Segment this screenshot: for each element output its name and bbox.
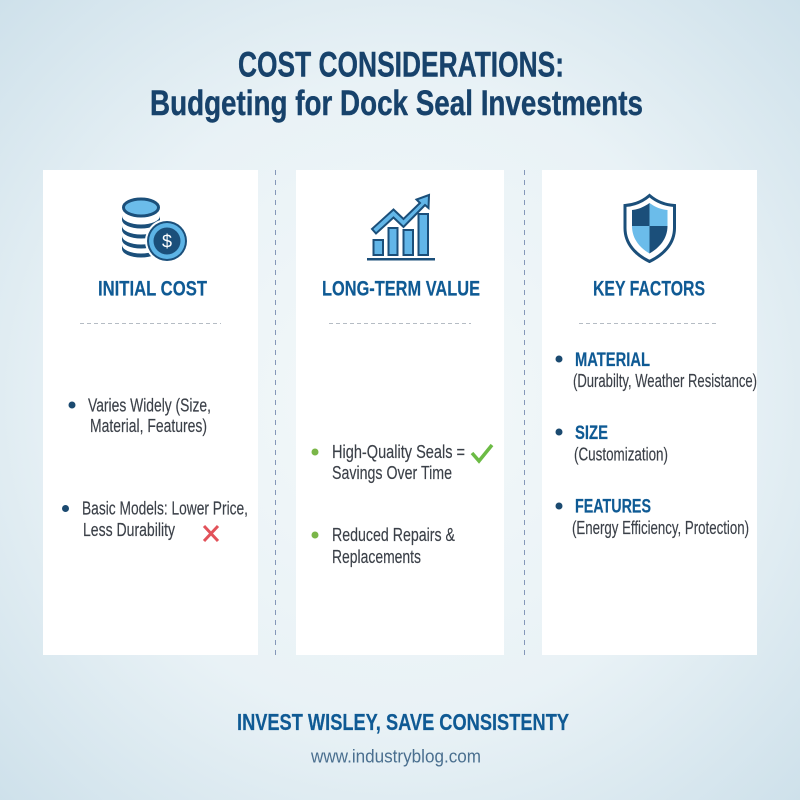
- factor: size: SIZE: [575, 422, 608, 444]
- bullet: varies widely: [68, 396, 211, 436]
- bullet: basic models: Less Durability: [83, 520, 175, 540]
- icon: growth chart: [367, 195, 435, 260]
- website: www.industryblog.com: [310, 746, 481, 766]
- heading: key factors: KEY FACTORS: [593, 278, 705, 300]
- bullet: high-quality seals: [312, 442, 465, 483]
- factor: features: FEATURES: [575, 496, 651, 518]
- factor: material: [556, 349, 757, 391]
- tagline: INVEST WISLEY, SAVE CONSISTENTY: [237, 709, 569, 735]
- icon: shield: [625, 196, 674, 262]
- bullet: basic models: Basic Models: Lower Price,: [82, 498, 248, 518]
- bullet: varies widely: Material, Features): [90, 416, 207, 436]
- title: Budgeting for Dock Seal Investments: [150, 84, 643, 123]
- factor: features: [556, 496, 749, 538]
- bullet: reduced repairs: Replacements: [332, 547, 421, 567]
- factor: size: [556, 422, 668, 464]
- bullet: reduced repairs: [312, 525, 455, 567]
- title: COST CONSIDERATIONS:: [238, 46, 564, 84]
- icon: green check: [472, 445, 492, 461]
- bullet: reduced repairs: Reduced Repairs &: [332, 525, 455, 545]
- bullet: high-quality seals: High-Quality Seals =: [332, 442, 465, 462]
- bullet: high-quality seals: Savings Over Time: [332, 463, 452, 483]
- heading: long-term value: LONG-TERM VALUE: [322, 278, 480, 300]
- bullet: varies widely: Varies Widely (Size,: [88, 396, 211, 416]
- factor: size: (Customization): [574, 444, 668, 464]
- panel: initial cost: [43, 170, 258, 655]
- icon: red cross: [204, 526, 218, 541]
- icon: coin stack: $: [162, 232, 172, 252]
- icon: coin stack: [122, 199, 189, 263]
- factor: material: MATERIAL: [575, 349, 650, 371]
- title: [150, 46, 643, 123]
- panel: long-term value: [296, 170, 504, 655]
- bullet: basic models: [62, 498, 248, 540]
- panel: key factors: [542, 170, 757, 655]
- heading: initial cost: INITIAL COST: [98, 278, 207, 300]
